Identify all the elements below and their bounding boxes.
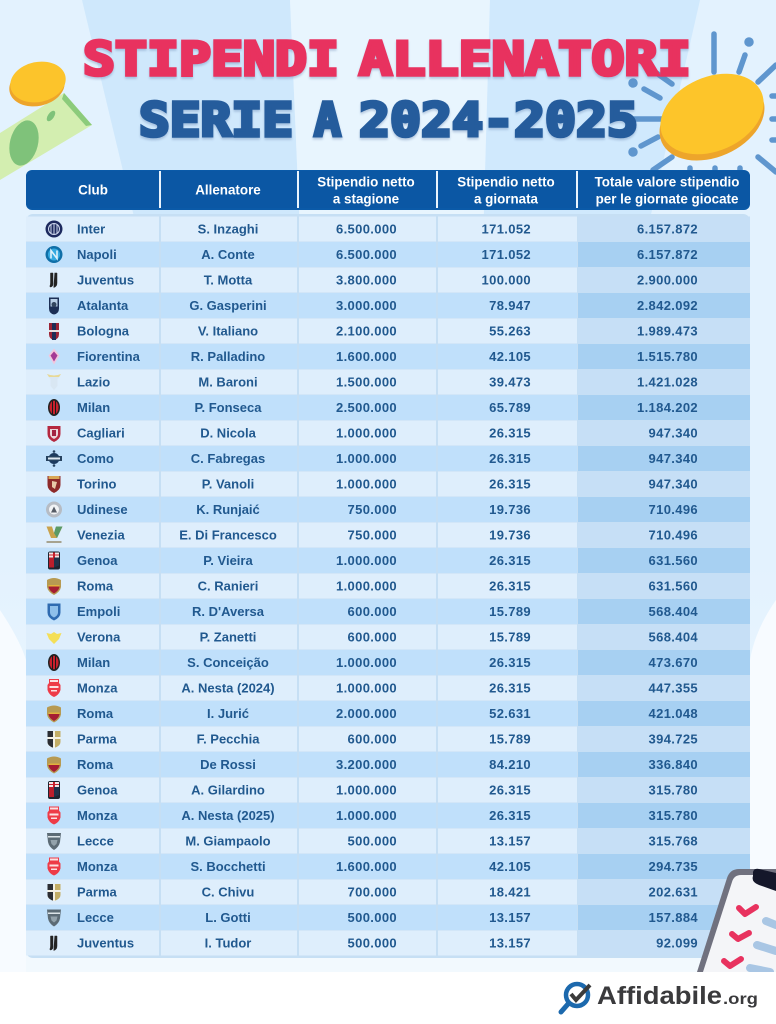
row: Inter: 6.157.872 (637, 222, 698, 236)
row: Juventus Motta: 2.900.000 (637, 272, 698, 288)
title (83, 32, 691, 147)
row: Monza Bocchetti (26, 854, 750, 879)
row: Roma Jurić (26, 701, 750, 726)
row: Atalanta: G. Gasperini (189, 298, 267, 313)
row: Torino: 1.000.000 (336, 476, 397, 492)
row: Milan Conceição: 26.315 (489, 655, 531, 670)
title line 2: SERIE (139, 93, 293, 147)
row: Genoa Vieira: 1.000.000 (336, 553, 397, 568)
row: Fiorentina: 1.600.000 (336, 349, 397, 364)
row: Roma Ranieri: 1.000.000 (336, 578, 397, 594)
row: Inter: 171.052 (482, 222, 531, 236)
row: Cagliari: 947.340 (649, 426, 698, 440)
row: Genoa Gilardino: A. Gilardino (191, 782, 265, 798)
row: Monza Bocchetti: Monza (77, 859, 118, 874)
row: Lecce Giampaolo: M. Giampaolo (185, 834, 271, 848)
row: Venezia: 750.000 (348, 528, 397, 542)
row: Napoli: 6.500.000 (336, 247, 397, 262)
illustration: clipboard (697, 869, 776, 972)
row: Napoli (26, 242, 750, 267)
row: Lazio: 39.473 (489, 374, 531, 390)
row: Como: 947.340 (649, 451, 698, 466)
row: Roma De Rossi: Roma (77, 757, 114, 772)
table header: Totale valore stipendio (595, 174, 739, 190)
row: Lecce Giampaolo: 13.157 (489, 834, 531, 848)
row: Venezia: 19.736 (489, 528, 531, 542)
row: Parma Pecchia: Parma (77, 732, 118, 746)
row: Inter: Inter (77, 222, 105, 236)
row: Monza Nesta 2024 (26, 676, 750, 700)
row: Verona: P. Zanetti (200, 630, 256, 644)
row: Parma Chivu: 700.000 (348, 884, 397, 900)
row: Fiorentina: 1.515.780 (637, 349, 698, 364)
title line 2: A (314, 93, 341, 147)
row: Torino: Torino (77, 476, 117, 492)
row: Lazio: Lazio (77, 374, 110, 390)
logo: Affidabile.org (561, 982, 758, 1012)
row: Roma Jurić: Roma (77, 706, 114, 721)
row: Milan Fonseca: 65.789 (489, 400, 531, 415)
illustration: coin rays (631, 34, 776, 172)
row: Monza Bocchetti: 294.735 (649, 859, 698, 874)
title line 1 (83, 32, 691, 86)
table header: Club (78, 182, 108, 198)
row: Venezia (26, 522, 750, 548)
row: Bologna: Bologna (77, 324, 130, 338)
row: Atalanta: 78.947 (489, 298, 531, 313)
row: Lecce Giampaolo: 315.768 (649, 834, 698, 848)
row: Milan Conceição (26, 650, 750, 675)
row: Juventus Motta: 3.800.000 (336, 272, 397, 288)
title line 2: 2024-2025 (359, 93, 638, 147)
row: Roma De Rossi: De Rossi (200, 757, 256, 772)
row: Verona: Verona (77, 630, 121, 644)
row: Roma Jurić: 52.631 (489, 706, 531, 721)
row: Monza Nesta 2024: Monza (77, 680, 118, 696)
row: Juventus Tudor: 500.000 (348, 936, 397, 950)
row: Milan Conceição: 1.000.000 (336, 655, 397, 670)
row: Juventus Motta: T. Motta (204, 272, 253, 288)
row: Lazio: 1.500.000 (336, 374, 397, 390)
row: Cagliari: D. Nicola (200, 426, 257, 440)
table header: Allenatore (195, 182, 261, 198)
row: Genoa Gilardino: 26.315 (489, 782, 531, 798)
row: Cagliari: Cagliari (77, 426, 125, 440)
row: Monza Nesta 2025: 26.315 (489, 808, 531, 823)
logo wordmark: .org (723, 991, 758, 1008)
row: Genoa Vieira: 26.315 (489, 553, 531, 568)
row: Parma Chivu: Parma (77, 884, 118, 900)
illustration: small coin (5, 57, 70, 111)
row: Genoa Vieira: 631.560 (649, 553, 698, 568)
table header: Stipendio netto (317, 174, 415, 190)
row: Torino: 26.315 (489, 476, 531, 492)
row: Genoa Vieira (26, 548, 750, 573)
row: Napoli: 171.052 (482, 247, 531, 262)
row: Juventus Motta: 100.000 (482, 272, 531, 288)
row: Roma De Rossi: 84.210 (489, 757, 531, 772)
row: Fiorentina (26, 344, 750, 369)
row: Empoli: 600.000 (348, 604, 397, 619)
icon: magnifier with check (561, 984, 590, 1012)
row: Monza Nesta 2024: 1.000.000 (336, 680, 397, 696)
row: Monza Nesta 2025: 315.780 (649, 808, 698, 823)
row: Roma Jurić: 421.048 (649, 706, 698, 721)
title line 1: STIPENDI (83, 32, 339, 86)
row: Udinese: K. Runjaić (196, 502, 260, 517)
row: Juventus Tudor: I. Tudor (205, 936, 251, 950)
row: Venezia: 710.496 (649, 528, 698, 542)
row: Bologna: 1.989.473 (637, 324, 698, 338)
row: Torino (26, 472, 750, 496)
row: Atalanta: 2.842.092 (637, 298, 698, 313)
table header (26, 171, 750, 208)
title line 2 (139, 93, 638, 147)
row: Verona: 15.789 (489, 630, 531, 644)
row: Fiorentina: 42.105 (489, 349, 531, 364)
row: Empoli (26, 599, 750, 624)
row: Fiorentina: Fiorentina (77, 349, 141, 364)
row: Udinese (26, 497, 750, 522)
row: Atalanta: 3.000.000 (336, 298, 397, 313)
row: Lecce Gotti: 13.157 (489, 910, 531, 925)
row: Lecce Gotti: Lecce (77, 910, 114, 925)
title line 1: ALLENATORI (359, 32, 691, 86)
row: Empoli: 568.404 (649, 604, 698, 619)
row: Udinese: 750.000 (348, 502, 397, 517)
row: Milan Conceição: S. Conceição (187, 655, 269, 670)
row: Monza Bocchetti: 1.600.000 (336, 859, 397, 874)
row: Roma De Rossi (26, 752, 750, 777)
row: Lazio (26, 370, 750, 394)
row: Monza Nesta 2025 (26, 803, 750, 828)
row: Venezia: E. Di Francesco (179, 528, 277, 542)
row: Monza Nesta 2024: 447.355 (649, 680, 698, 696)
row: Milan Conceição: 473.670 (649, 655, 698, 670)
row: Como: 26.315 (489, 451, 531, 466)
row: Udinese: 710.496 (649, 502, 698, 517)
row: Genoa Vieira: P. Vieira (203, 553, 253, 568)
row: Genoa Gilardino: Genoa (77, 782, 118, 798)
row: Atalanta (26, 293, 750, 318)
row: Monza Nesta 2024: A. Nesta (2024) (181, 680, 275, 696)
row: Roma De Rossi: 336.840 (649, 757, 698, 772)
row: Genoa Vieira: Genoa (77, 553, 118, 568)
row: Monza Nesta 2025: Monza (77, 808, 118, 823)
row: Parma Pecchia: 394.725 (649, 732, 698, 746)
row: Roma Jurić: I. Jurić (207, 706, 249, 721)
row: Juventus Tudor: 92.099 (656, 936, 698, 950)
row: Roma Ranieri: Roma (77, 578, 114, 594)
table header: Stipendio netto (457, 174, 555, 190)
row: Parma Pecchia (26, 726, 750, 752)
row: Udinese: 19.736 (489, 502, 531, 517)
row: Juventus Tudor (26, 930, 750, 956)
row: Bologna: V. Italiano (198, 324, 258, 338)
row: Inter (26, 216, 750, 242)
row: Bologna: 55.263 (489, 324, 531, 338)
row: Monza Bocchetti: 42.105 (489, 859, 531, 874)
row: Como: C. Fabregas (191, 451, 265, 466)
row: Como (26, 446, 750, 471)
row: Juventus Motta (26, 268, 750, 292)
row: Empoli: 15.789 (489, 604, 531, 619)
row: Lecce Giampaolo (26, 828, 750, 854)
row: Bologna: 2.100.000 (336, 324, 397, 338)
row: Parma Chivu: 18.421 (489, 884, 531, 900)
row: Genoa Gilardino (26, 778, 750, 802)
row: Fiorentina: R. Palladino (191, 349, 265, 364)
row: Verona: 600.000 (348, 630, 397, 644)
row: Juventus Motta: Juventus (77, 272, 134, 288)
row: Monza Nesta 2025: A. Nesta (2025) (181, 808, 275, 823)
row: Cagliari: 1.000.000 (336, 426, 397, 440)
row: Empoli: Empoli (77, 604, 120, 619)
row: Monza Nesta 2025: 1.000.000 (336, 808, 397, 823)
row: Milan Conceição: Milan (77, 655, 110, 670)
row: Lecce Giampaolo: 500.000 (348, 834, 397, 848)
row: Inter: S. Inzaghi (198, 222, 258, 236)
row: Inter: 6.500.000 (336, 222, 397, 236)
row: Monza Bocchetti: S. Bocchetti (190, 859, 266, 874)
row: Torino: P. Vanoli (202, 476, 254, 492)
row: Lecce Gotti: 157.884 (649, 910, 698, 925)
row: Parma Pecchia: F. Pecchia (197, 732, 260, 746)
row: Atalanta: Atalanta (77, 298, 129, 313)
row: Roma Ranieri: 26.315 (489, 578, 531, 594)
row: Monza Nesta 2024: 26.315 (489, 680, 531, 696)
row: Genoa Gilardino: 315.780 (649, 782, 698, 798)
row: Roma Jurić: 2.000.000 (336, 706, 397, 721)
row: Roma Ranieri: C. Ranieri (198, 578, 258, 594)
row: Verona: 568.404 (649, 630, 698, 644)
row: Parma Pecchia: 15.789 (489, 732, 531, 746)
row: Napoli: Napoli (77, 247, 117, 262)
row: Lazio: 1.421.028 (637, 374, 698, 390)
row: Roma De Rossi: 3.200.000 (336, 757, 397, 772)
logo wordmark: Affidabile (597, 982, 722, 1010)
row: Empoli: R. D'Aversa (192, 604, 265, 619)
row: Juventus Tudor: Juventus (77, 936, 134, 950)
row: Cagliari (26, 420, 750, 446)
row: Udinese: Udinese (77, 502, 128, 517)
row: Lazio: M. Baroni (198, 374, 258, 390)
table panel (26, 170, 750, 958)
row: Milan Fonseca: 2.500.000 (336, 400, 397, 415)
footer white band (0, 972, 776, 1024)
row: Genoa Gilardino: 1.000.000 (336, 782, 397, 798)
row: Lecce Giampaolo: Lecce (77, 834, 114, 848)
row: Torino: 947.340 (649, 476, 698, 492)
row: Lecce Gotti: 500.000 (348, 910, 397, 925)
row: Como: Como (77, 451, 114, 466)
row: Venezia: Venezia (77, 528, 125, 542)
row: Parma Chivu (26, 880, 750, 904)
row: Roma Ranieri: 631.560 (649, 578, 698, 594)
table header: per le giornate giocate (596, 192, 738, 206)
table header: a stagione (333, 192, 399, 206)
row: Bologna (26, 318, 750, 344)
row: Napoli: 6.157.872 (637, 247, 698, 262)
illustration: large coin (647, 58, 776, 176)
row: Parma Pecchia: 600.000 (348, 732, 397, 746)
illustration: banknote (0, 93, 92, 180)
row: Milan Fonseca (26, 395, 750, 420)
row: Cagliari: 26.315 (489, 426, 531, 440)
row: Parma Chivu: C. Chivu (202, 884, 254, 900)
row: Napoli: A. Conte (201, 247, 255, 262)
row: Milan Fonseca: Milan (77, 400, 110, 415)
row: Lecce Gotti: L. Gotti (205, 910, 251, 925)
row: Lecce Gotti (26, 905, 750, 930)
row: Milan Fonseca: P. Fonseca (195, 400, 262, 415)
row: Roma Ranieri (26, 574, 750, 598)
row: Parma Chivu: 202.631 (649, 884, 698, 900)
row: Juventus Tudor: 13.157 (489, 936, 531, 950)
row: Como: 1.000.000 (336, 451, 397, 466)
row: Verona (26, 624, 750, 650)
row: Milan Fonseca: 1.184.202 (637, 400, 698, 415)
table header: a giornata (474, 192, 539, 206)
